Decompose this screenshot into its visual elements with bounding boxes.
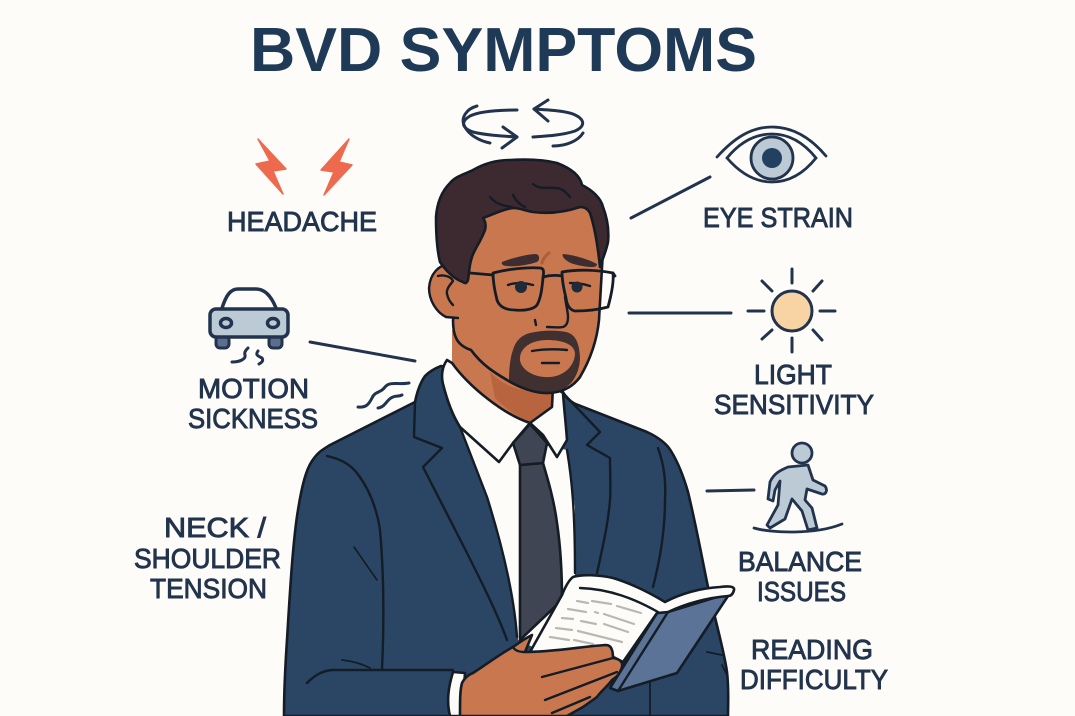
tie (513, 424, 562, 640)
man in suit reading a book (284, 160, 734, 716)
eyebrows (502, 254, 597, 267)
icon: sun (748, 269, 835, 352)
label: balance issues: ISSUES (757, 576, 846, 607)
label: motion sickness: MOTION (198, 373, 309, 404)
jacket lapels and seams (307, 393, 727, 716)
label: balance issues (738, 546, 862, 607)
label: neck and shoulder tension: TENSION (150, 573, 267, 604)
head (429, 160, 615, 393)
symptom: balance issues (738, 443, 862, 607)
label: balance issues: BALANCE (738, 546, 862, 577)
shirt cuff (448, 672, 465, 716)
label: light sensitivity (714, 359, 874, 420)
pointer line: motion sickness (310, 342, 415, 361)
label: neck and shoulder tension (134, 512, 281, 604)
label: light sensitivity: SENSITIVITY (714, 389, 874, 420)
label: light sensitivity: LIGHT (754, 359, 832, 390)
symptom: eye strain (703, 127, 853, 233)
symptom: headache (227, 139, 377, 237)
jacket (284, 366, 728, 716)
label: reading difficulty: DIFFICULTY (740, 664, 888, 695)
symptom: motion sickness (188, 289, 318, 434)
goatee and mouth (471, 331, 580, 393)
pointer line: eye strain (631, 177, 710, 218)
shirt and collar (442, 360, 575, 660)
label: reading difficulty: READING (751, 634, 873, 665)
hand (460, 635, 622, 716)
hair strands (490, 184, 570, 207)
label: headache: HEADACHE (227, 206, 377, 237)
pointer line: balance issues (707, 490, 754, 491)
book (530, 575, 734, 691)
title: BVD SYMPTOMS (250, 16, 757, 85)
icon: nausea squiggles (358, 383, 409, 408)
icon: car (210, 289, 288, 364)
hair (436, 160, 608, 283)
icon: dizziness rotation arrows (463, 100, 583, 148)
icon: eye (717, 127, 826, 182)
glasses (470, 268, 615, 311)
label: eye strain: EYE STRAIN (703, 202, 853, 233)
worry crease (542, 253, 549, 263)
label: motion sickness (188, 373, 318, 434)
icon: lightning bolts (256, 139, 352, 195)
label: motion sickness: SICKNESS (188, 403, 318, 434)
symptom: light sensitivity (714, 269, 874, 420)
pointer line: light sensitivity (629, 312, 731, 314)
book text lines (550, 601, 641, 644)
label: reading difficulty (740, 634, 888, 695)
label: neck and shoulder tension: NECK / (164, 512, 266, 543)
label: neck and shoulder tension: SHOULDER (134, 543, 281, 574)
ear (429, 265, 470, 318)
nose (535, 297, 568, 327)
neck (452, 330, 555, 423)
face (453, 205, 603, 393)
eyes (508, 281, 590, 293)
icon: walking figure on a curved line (754, 443, 842, 532)
